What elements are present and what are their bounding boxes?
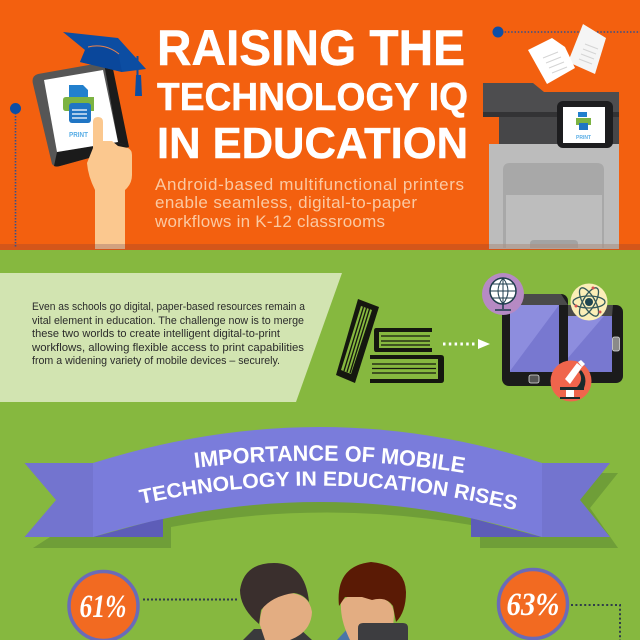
panel: intro text: workflows, allowing flexible access to print capabilities	[31, 342, 305, 354]
banner: ribbon heading: IMPORTANCE OF MOBILE	[194, 445, 465, 473]
title	[157, 20, 468, 168]
panel: intro text: from a widening variety of mobile devices – securely.	[32, 355, 280, 367]
arrow: books to tablets	[443, 339, 490, 349]
panel: intro text	[0, 273, 342, 402]
banner: ribbon heading: TECHNOLOGY IN EDUCATION RISES	[138, 472, 517, 510]
icon: multifunction printer	[483, 83, 619, 249]
icon: large tablet	[502, 294, 568, 386]
icon: hand pressing tablet	[87, 117, 132, 249]
icon: tablet with print screen	[33, 62, 129, 167]
stat: 61 percent	[69, 572, 238, 640]
icon: multifunction printer: PRINT	[576, 135, 591, 141]
subtitle: workflows in K-12 classrooms	[154, 212, 385, 231]
subtitle: Android-based multifunctional printers	[155, 175, 464, 194]
icon: flying paper sheets	[528, 24, 606, 84]
panel: intro text: vital element in education. The challenge now is to merge	[32, 315, 304, 327]
stat: 61 percent: 61%	[80, 589, 126, 625]
icon: globe badge	[482, 273, 524, 315]
title: TECHNOLOGY IQ	[157, 76, 468, 119]
icon: graduation cap	[63, 32, 146, 96]
panel: intro text: Even as schools go digital, paper-based resources remain a	[32, 301, 306, 313]
icon: stack of books	[336, 299, 444, 383]
icon: atom badge	[570, 284, 608, 320]
icon: microscope badge	[550, 360, 592, 402]
icon: small tablet	[562, 305, 623, 383]
subtitle	[154, 175, 464, 231]
panel: intro text: these two worlds to create intelligent digital-to-print	[32, 328, 280, 340]
figure: student left	[240, 563, 312, 640]
icon: tablet with print screen: PRINT	[69, 132, 89, 139]
title: RAISING THE	[157, 20, 465, 76]
figure: student right with tablet	[337, 562, 408, 640]
title: IN EDUCATION	[157, 119, 468, 168]
stat: 63 percent: 63%	[506, 587, 560, 623]
banner: ribbon heading	[24, 427, 618, 548]
stat: 63 percent	[498, 570, 620, 640]
panel: orange header	[0, 0, 640, 250]
ribbon shadow	[33, 473, 618, 548]
subtitle: enable seamless, digital-to-paper	[155, 193, 417, 212]
